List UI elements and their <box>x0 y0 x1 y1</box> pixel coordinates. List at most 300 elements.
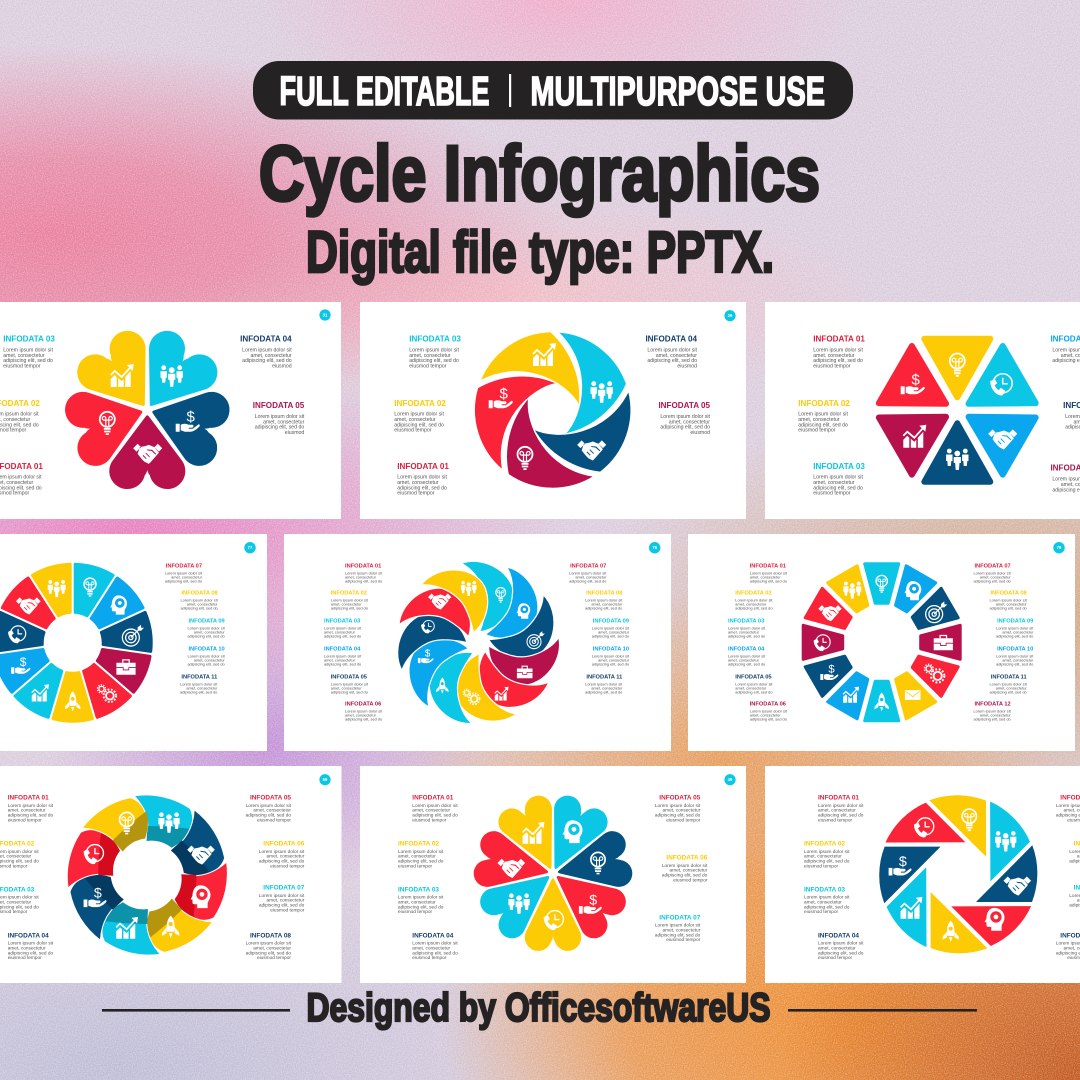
icons: two tone ring <box>84 812 215 939</box>
label: INFODATA 05: Lorem ipsum dolor sit <box>331 681 369 686</box>
label: INFODATA 03: eiusmod tempor <box>804 909 838 915</box>
label: INFODATA 11 <box>180 674 218 694</box>
label: INFODATA 11: amet, consectetur <box>591 685 623 690</box>
icons: triangle hexagon <box>901 354 1017 470</box>
label: INFODATA 04: adipiscing elit, sed do <box>412 950 458 956</box>
label: INFODATA 06: Lorem ipsum dolor sit <box>259 849 305 855</box>
label: INFODATA 01 <box>345 564 383 584</box>
label: INFODATA 07 <box>1069 885 1080 914</box>
page number badge <box>1053 542 1065 553</box>
badge: full editable multipurpose use: MULTIPURPOSE USE <box>530 68 825 114</box>
label: INFODATA 03 <box>804 886 850 915</box>
label: INFODATA 06: adipiscing elit, sed do <box>662 873 708 879</box>
label: INFODATA 05: Lorem ipsum dolor sit <box>255 414 305 420</box>
label: INFODATA 05: amet, consectetur <box>663 808 701 814</box>
label: INFODATA 02: eiusmod tempor <box>798 428 836 434</box>
label: INFODATA 07: eiusmod tempor <box>270 908 305 914</box>
label: INFODATA 08: Lorem ipsum dolor sit <box>585 598 623 603</box>
label: INFODATA 04 <box>324 646 362 666</box>
label: INFODATA 12: Lorem ipsum dolor sit <box>973 709 1012 714</box>
label: INFODATA 02 <box>331 591 369 611</box>
label: INFODATA 10: Lorem ipsum dolor sit <box>592 653 630 658</box>
label: INFODATA 02: Lorem ipsum dolor sit <box>804 849 850 855</box>
label: INFODATA 08: Lorem ipsum dolor sit <box>180 598 219 603</box>
title: Cycle Infographics <box>259 129 820 217</box>
label: INFODATA 01 <box>8 795 54 824</box>
label: INFODATA 07: INFODATA 07 <box>659 914 701 921</box>
label: INFODATA 04 <box>728 646 766 666</box>
label: INFODATA 01: amet, consectetur <box>813 353 855 359</box>
label: INFODATA 07 <box>259 885 305 914</box>
label: INFODATA 03: Lorem ipsum dolor sit <box>813 475 863 481</box>
label: INFODATA 12: INFODATA 12 <box>974 702 1011 708</box>
label: INFODATA 03 <box>0 886 39 915</box>
label: INFODATA 07: Lorem ipsum dolor sit <box>973 571 1012 576</box>
label: INFODATA 02: adipiscing elit, sed do <box>394 422 444 428</box>
label: INFODATA 08: Lorem ipsum dolor sit <box>246 940 292 946</box>
icons: trapezoid ring <box>814 575 953 711</box>
label: INFODATA 05: amet, consectetur <box>669 419 710 425</box>
label: INFODATA 10 <box>592 646 630 666</box>
label: INFODATA 04: INFODATA 04 <box>645 334 697 343</box>
label: INFODATA 11: adipiscing elit, sed do <box>989 689 1027 694</box>
label: INFODATA 01: Lorem ipsum dolor sit <box>345 571 383 576</box>
label: INFODATA 11: INFODATA 11 <box>181 674 217 680</box>
label: INFODATA 07: Lorem ipsum dolor sit <box>165 571 203 576</box>
label: INFODATA 08: adipiscing elit, sed do <box>585 606 622 611</box>
label: INFODATA 07 <box>655 914 701 943</box>
label: INFODATA 02: INFODATA 02 <box>798 399 850 408</box>
label: INFODATA 05: INFODATA 05 <box>253 401 305 410</box>
label: INFODATA 03: eiusmod tempor <box>813 491 851 497</box>
page number badge: 77 <box>248 545 253 550</box>
label: INFODATA 02: adipiscing elit, sed do <box>804 859 850 865</box>
label: INFODATA 03: INFODATA 03 <box>324 619 360 625</box>
panel: twelve trapezoid ring <box>688 534 1075 751</box>
label: INFODATA 09: amet, consectetur <box>1002 630 1034 635</box>
label: INFODATA 05 <box>735 674 773 694</box>
label: INFODATA 11 <box>585 674 623 694</box>
chart: heart petal cycle <box>60 324 234 489</box>
label: INFODATA 02: amet, consectetur <box>394 417 436 423</box>
label: INFODATA 04: adipiscing elit, sed do <box>728 661 765 666</box>
label: INFODATA 01: adipiscing elit, sed do <box>8 813 53 819</box>
label: INFODATA 02: INFODATA 02 <box>394 399 446 408</box>
label: INFODATA 03: amet, consectetur <box>813 480 855 486</box>
panel: seven heart flower <box>360 766 746 983</box>
label: INFODATA 01: eiusmod tempor <box>813 363 851 369</box>
label: INFODATA 05 <box>1063 401 1080 436</box>
label: INFODATA 01 <box>412 795 458 824</box>
label: INFODATA 11: adipiscing elit, sed do <box>180 689 217 694</box>
label: INFODATA 04: amet, consectetur <box>324 657 356 662</box>
icons: aperture blades <box>889 809 1031 942</box>
label: INFODATA 11 <box>989 674 1028 694</box>
label: INFODATA 01: eiusmod tempor <box>412 818 447 824</box>
label: INFODATA 04: eiusmod <box>677 363 697 369</box>
label: INFODATA 04: Lorem ipsum dolor sit <box>8 940 54 946</box>
label: INFODATA 01 <box>818 795 864 824</box>
label: INFODATA 05: eiusmod tempor <box>257 818 291 824</box>
label: INFODATA 02: eiusmod tempor <box>398 864 432 870</box>
label: INFODATA 05: Lorem ipsum dolor sit <box>660 414 711 420</box>
label: INFODATA 05: adipiscing elit, sed do <box>331 689 368 694</box>
label: INFODATA 11: INFODATA 11 <box>586 674 622 680</box>
label: INFODATA 03: INFODATA 03 <box>804 886 845 893</box>
icons: wedge ring <box>8 578 144 711</box>
label: INFODATA 06: INFODATA 06 <box>750 701 786 707</box>
label: INFODATA 07: adipiscing elit, sed do <box>973 579 1011 584</box>
label: INFODATA 04: adipiscing elit, sed do <box>8 950 53 956</box>
label: INFODATA 11: Lorem ipsum dolor sit <box>585 681 623 686</box>
label: INFODATA 04: adipiscing elit, sed do <box>647 358 697 364</box>
label: INFODATA 11: Lorem ipsum dolor sit <box>180 681 218 686</box>
label: INFODATA 04: Lorem ipsum dolor sit <box>242 348 292 354</box>
label: INFODATA 08: amet, consectetur <box>996 602 1027 607</box>
label: INFODATA 02 <box>0 841 39 870</box>
label: INFODATA 06: amet, consectetur <box>750 712 781 717</box>
label: INFODATA 06: INFODATA 06 <box>263 841 305 848</box>
label: INFODATA 07 <box>165 564 203 584</box>
page number badge: 49 <box>728 777 733 782</box>
label: INFODATA 11: Lorem ipsum dolor sit <box>989 681 1028 686</box>
label: INFODATA 03: INFODATA 03 <box>398 886 439 893</box>
label: INFODATA 08: amet, consectetur <box>187 602 218 607</box>
label: INFODATA 09: amet, consectetur <box>194 630 225 635</box>
footer credit: Designed by OfficesoftwareUS <box>306 986 770 1030</box>
label: INFODATA 09: INFODATA 09 <box>593 619 629 625</box>
icons: seven heart flower <box>497 820 605 930</box>
chart: trapezoid ring <box>803 564 960 721</box>
label: INFODATA 10: INFODATA 10 <box>593 646 629 652</box>
label: INFODATA 09: adipiscing elit, sed do <box>187 634 225 639</box>
label: INFODATA 03: adipiscing elit, sed do <box>804 904 850 910</box>
label: INFODATA 02: INFODATA 02 <box>804 841 845 848</box>
label: INFODATA 05: eiusmod tempor <box>666 818 701 824</box>
label: INFODATA 06 <box>1050 464 1080 499</box>
label: INFODATA 07: eiusmod tempor <box>666 937 701 943</box>
label: INFODATA 04: adipiscing elit, sed do <box>242 358 292 364</box>
page number badge: 26 <box>728 313 733 318</box>
label: INFODATA 11: amet, consectetur <box>186 685 218 690</box>
label: INFODATA 09: Lorem ipsum dolor sit <box>187 626 226 631</box>
label: INFODATA 05 <box>658 401 711 436</box>
label: INFODATA 10: adipiscing elit, sed do <box>996 661 1033 666</box>
label: INFODATA 06: adipiscing elit, sed do <box>750 716 787 721</box>
label: INFODATA 02: adipiscing elit, sed do <box>735 606 773 611</box>
page number badge <box>244 542 256 553</box>
label: INFODATA 05 <box>246 795 292 824</box>
label: INFODATA 04: INFODATA 04 <box>240 334 292 343</box>
label: INFODATA 04: eiusmod tempor <box>8 955 42 961</box>
label: INFODATA 07: amet, consectetur <box>171 575 203 580</box>
label: INFODATA 03 <box>3 334 55 369</box>
label: INFODATA 04: INFODATA 04 <box>412 932 454 939</box>
page number badge <box>319 309 331 321</box>
label: INFODATA 01 <box>813 334 865 369</box>
label: INFODATA 09 <box>996 619 1034 639</box>
label: INFODATA 04: Lorem ipsum dolor sit <box>324 653 362 658</box>
label: INFODATA 04: Lorem ipsum dolor sit <box>647 348 698 354</box>
label: INFODATA 03: Lorem ipsum dolor sit <box>324 626 362 631</box>
label: INFODATA 08: amet, consectetur <box>591 602 623 607</box>
label: INFODATA 03: Lorem ipsum dolor sit <box>398 894 444 900</box>
label: INFODATA 05: amet, consectetur <box>253 808 291 814</box>
panel: eleven wedge ring <box>0 534 267 751</box>
label: INFODATA 05 <box>331 674 369 694</box>
label: INFODATA 03 <box>409 334 461 369</box>
label: INFODATA 02 <box>398 841 444 870</box>
label: INFODATA 03: amet, consectetur <box>804 899 842 905</box>
label: INFODATA 05: Lorem ipsum dolor sit <box>735 681 773 686</box>
label: INFODATA 04: adipiscing elit, sed do <box>324 661 361 666</box>
label: INFODATA 10 <box>996 646 1034 666</box>
chart: wedge ring <box>0 562 153 721</box>
label: INFODATA 06 <box>259 841 305 870</box>
label: INFODATA 03: amet, consectetur <box>398 899 436 905</box>
page number badge <box>319 774 331 785</box>
label: INFODATA 06: Lorem ipsum dolor sit <box>345 708 383 713</box>
label: INFODATA 04: amet, consectetur <box>412 945 450 951</box>
label: INFODATA 03 <box>813 462 865 497</box>
icons: crescent pinwheel <box>418 581 545 704</box>
label: INFODATA 06: amet, consectetur <box>267 854 305 860</box>
label: INFODATA 03: Lorem ipsum dolor sit <box>409 348 459 354</box>
label: INFODATA 07: INFODATA 07 <box>570 564 606 570</box>
label: INFODATA 09: Lorem ipsum dolor sit <box>996 626 1034 631</box>
label: INFODATA 08: Lorem ipsum dolor sit <box>989 598 1028 603</box>
label: INFODATA 10: adipiscing elit, sed do <box>592 661 629 666</box>
label: INFODATA 05: amet, consectetur <box>735 685 767 690</box>
label: INFODATA 01 <box>397 462 449 497</box>
panel: aperture cycle <box>765 766 1080 983</box>
label: INFODATA 04: eiusmod tempor <box>412 955 447 961</box>
label: INFODATA 02: eiusmod tempor <box>804 864 838 870</box>
label: INFODATA 03: INFODATA 03 <box>3 334 55 343</box>
label: INFODATA 07: Lorem ipsum dolor sit <box>569 571 607 576</box>
label: INFODATA 04: Lorem ipsum dolor sit <box>728 653 766 658</box>
label: INFODATA 09 <box>187 619 226 639</box>
label: INFODATA 05: amet, consectetur <box>263 419 305 425</box>
label: INFODATA 03: adipiscing elit, sed do <box>409 358 459 364</box>
label: INFODATA 03: amet, consectetur <box>409 353 451 359</box>
label: INFODATA 04: amet, consectetur <box>656 353 697 359</box>
label: INFODATA 01: Lorem ipsum dolor sit <box>818 803 864 809</box>
label: INFODATA 10: adipiscing elit, sed do <box>187 661 225 666</box>
label: INFODATA 09 <box>592 619 630 639</box>
label: INFODATA 07: amet, consectetur <box>663 927 701 933</box>
label: INFODATA 07: INFODATA 07 <box>263 885 305 892</box>
label: INFODATA 03: Lorem ipsum dolor sit <box>3 348 53 354</box>
label: INFODATA 02 <box>798 399 850 434</box>
label: INFODATA 08: adipiscing elit, sed do <box>180 606 218 611</box>
label: INFODATA 02 <box>804 841 850 870</box>
label: INFODATA 03: adipiscing elit, sed do <box>3 358 53 364</box>
label: INFODATA 01: INFODATA 01 <box>813 334 865 343</box>
label: INFODATA 01: adipiscing elit, sed do <box>345 579 382 584</box>
label: INFODATA 04 <box>645 334 698 369</box>
label: INFODATA 01: Lorem ipsum dolor sit <box>397 475 447 481</box>
label: INFODATA 01 <box>0 462 43 497</box>
label: INFODATA 03: amet, consectetur <box>728 630 760 635</box>
label: INFODATA 10: amet, consectetur <box>1002 657 1034 662</box>
label: INFODATA 05: INFODATA 05 <box>658 401 710 410</box>
label: INFODATA 03: eiusmod tempor <box>409 363 447 369</box>
label: INFODATA 08: adipiscing elit, sed do <box>246 950 291 956</box>
label: INFODATA 03: adipiscing elit, sed do <box>324 634 361 639</box>
label: INFODATA 04: amet, consectetur <box>728 657 760 662</box>
label: INFODATA 05: adipiscing elit, sed do <box>255 425 304 431</box>
label: INFODATA 04 <box>1050 334 1080 369</box>
panel: five blade swirl <box>360 302 746 519</box>
label: INFODATA 01: INFODATA 01 <box>8 795 49 802</box>
label: INFODATA 01: adipiscing elit, sed do <box>412 813 458 819</box>
label: INFODATA 07: Lorem ipsum dolor sit <box>655 922 701 928</box>
label: INFODATA 06: amet, consectetur <box>345 712 377 717</box>
label: INFODATA 02: adipiscing elit, sed do <box>331 606 368 611</box>
label: INFODATA 07: adipiscing elit, sed do <box>655 932 701 938</box>
label: INFODATA 07: INFODATA 07 <box>166 564 202 570</box>
label: INFODATA 03: adipiscing elit, sed do <box>813 485 863 491</box>
label: INFODATA 03: INFODATA 03 <box>728 619 764 625</box>
label: INFODATA 10: INFODATA 10 <box>188 646 225 652</box>
label: INFODATA 02: amet, consectetur <box>798 417 840 423</box>
label: INFODATA 01 <box>750 564 788 584</box>
label: INFODATA 02: Lorem ipsum dolor sit <box>735 598 773 603</box>
label: INFODATA 06 <box>345 701 383 721</box>
label: INFODATA 10: amet, consectetur <box>194 657 225 662</box>
label: INFODATA 01: INFODATA 01 <box>412 795 454 802</box>
label: INFODATA 03: amet, consectetur <box>324 630 356 635</box>
label: INFODATA 02 <box>0 399 40 434</box>
badge: full editable multipurpose use <box>253 61 853 120</box>
label: INFODATA 04: amet, consectetur <box>8 945 46 951</box>
label: INFODATA 01: Lorem ipsum dolor sit <box>8 803 54 809</box>
label: INFODATA 07: adipiscing elit, sed do <box>569 579 606 584</box>
label: INFODATA 03: eiusmod tempor <box>3 363 41 369</box>
label: INFODATA 01: amet, consectetur <box>750 575 781 580</box>
chart: seven heart flower <box>471 791 635 951</box>
label: INFODATA 11: adipiscing elit, sed do <box>585 689 622 694</box>
panel: crescent pinwheel <box>284 534 671 751</box>
label: INFODATA 04: Lorem ipsum dolor sit <box>818 940 864 946</box>
label: INFODATA 02: INFODATA 02 <box>331 591 367 597</box>
label: INFODATA 06 <box>662 855 708 884</box>
icons: heart petal cycle <box>100 364 200 464</box>
label: INFODATA 03: adipiscing elit, sed do <box>728 634 765 639</box>
label: INFODATA 05: INFODATA 05 <box>331 674 367 680</box>
label: INFODATA 02: Lorem ipsum dolor sit <box>398 849 444 855</box>
label: INFODATA 01: INFODATA 01 <box>818 795 859 802</box>
label: INFODATA 06: amet, consectetur <box>670 868 708 874</box>
page number badge: 59 <box>323 777 328 782</box>
label: INFODATA 02: Lorem ipsum dolor sit <box>798 412 848 418</box>
label: INFODATA 03: amet, consectetur <box>3 353 45 359</box>
label: INFODATA 02: INFODATA 02 <box>735 591 772 597</box>
label: INFODATA 04: INFODATA 04 <box>324 646 361 652</box>
label: INFODATA 02: amet, consectetur <box>331 602 362 607</box>
label: INFODATA 08: adipiscing elit, sed do <box>989 606 1027 611</box>
label: INFODATA 05: Lorem ipsum dolor sit <box>655 803 701 809</box>
label: INFODATA 07: Lorem ipsum dolor sit <box>259 893 305 899</box>
page number badge: 76 <box>652 545 658 550</box>
label: INFODATA 08 <box>180 591 219 611</box>
label: INFODATA 02 <box>735 591 773 611</box>
label: INFODATA 08: eiusmod tempor <box>257 955 291 961</box>
label: INFODATA 01: amet, consectetur <box>412 808 450 814</box>
panel: two tone swirl ring <box>0 766 342 983</box>
label: INFODATA 02 <box>394 399 446 434</box>
label: INFODATA 10: INFODATA 10 <box>997 646 1033 652</box>
label: INFODATA 02: INFODATA 02 <box>398 841 439 848</box>
label: INFODATA 06: INFODATA 06 <box>666 855 708 862</box>
label: INFODATA 10: Lorem ipsum dolor sit <box>996 653 1034 658</box>
label: INFODATA 08 <box>989 591 1028 611</box>
label: INFODATA 06: eiusmod tempor <box>673 878 708 884</box>
label: INFODATA 05: adipiscing elit, sed do <box>660 425 710 431</box>
label: INFODATA 09: INFODATA 09 <box>997 619 1033 625</box>
page number badge <box>724 774 736 785</box>
chart: swirl cycle <box>456 317 658 516</box>
label: INFODATA 09: INFODATA 09 <box>188 619 225 625</box>
subtitle: Digital file type: PPTX. <box>306 220 774 285</box>
label: INFODATA 04: amet, consectetur <box>818 945 856 951</box>
label: INFODATA 04: Lorem ipsum dolor sit <box>412 940 458 946</box>
label: INFODATA 01: adipiscing elit, sed do <box>397 485 447 491</box>
label: INFODATA 06: adipiscing elit, sed do <box>345 716 382 721</box>
label: INFODATA 07: INFODATA 07 <box>974 564 1011 570</box>
label: INFODATA 01: Lorem ipsum dolor sit <box>412 803 458 809</box>
label: INFODATA 08 <box>246 932 292 961</box>
label: INFODATA 04: amet, consectetur <box>250 353 292 359</box>
label: INFODATA 05: INFODATA 05 <box>250 795 291 802</box>
chart: crescent pinwheel <box>392 555 567 731</box>
label: INFODATA 05: eiusmod <box>690 430 710 436</box>
label: INFODATA 02: amet, consectetur <box>735 602 767 607</box>
label: INFODATA 03 <box>398 886 444 915</box>
label: INFODATA 05 <box>655 795 701 824</box>
label: INFODATA 01: INFODATA 01 <box>750 564 786 570</box>
chart: two tone ring <box>59 786 236 964</box>
label: INFODATA 04: eiusmod <box>272 363 292 369</box>
label: INFODATA 01: INFODATA 01 <box>345 564 381 570</box>
label: INFODATA 05: INFODATA 05 <box>659 795 701 802</box>
chart: aperture blades <box>879 795 1037 953</box>
label: INFODATA 08: INFODATA 08 <box>181 591 218 597</box>
page number badge <box>724 310 736 321</box>
label: INFODATA 01: Lorem ipsum dolor sit <box>750 571 788 576</box>
icons: swirl cycle <box>489 343 613 469</box>
label: INFODATA 02: eiusmod tempor <box>394 428 432 434</box>
label: INFODATA 09: Lorem ipsum dolor sit <box>592 626 630 631</box>
label: INFODATA 06: eiusmod tempor <box>270 864 305 870</box>
label: INFODATA 09: adipiscing elit, sed do <box>592 634 629 639</box>
label: INFODATA 04 <box>240 334 292 369</box>
label: INFODATA 05: adipiscing elit, sed do <box>735 689 773 694</box>
label: INFODATA 07: amet, consectetur <box>575 575 607 580</box>
label: INFODATA 09: amet, consectetur <box>598 630 630 635</box>
label: INFODATA 01: eiusmod tempor <box>8 818 42 824</box>
label: INFODATA 05: amet, consectetur <box>331 685 362 690</box>
page number badge: 31 <box>323 312 328 318</box>
page number badge <box>649 542 660 553</box>
label: INFODATA 11: amet, consectetur <box>996 685 1027 690</box>
badge: full editable multipurpose use: FULL EDITABLE <box>280 68 490 114</box>
label: INFODATA 11: INFODATA 11 <box>991 674 1027 680</box>
panel: six triangle hexagon <box>765 302 1080 519</box>
label: INFODATA 04: INFODATA 04 <box>728 646 765 652</box>
label: INFODATA 08 <box>585 591 623 611</box>
